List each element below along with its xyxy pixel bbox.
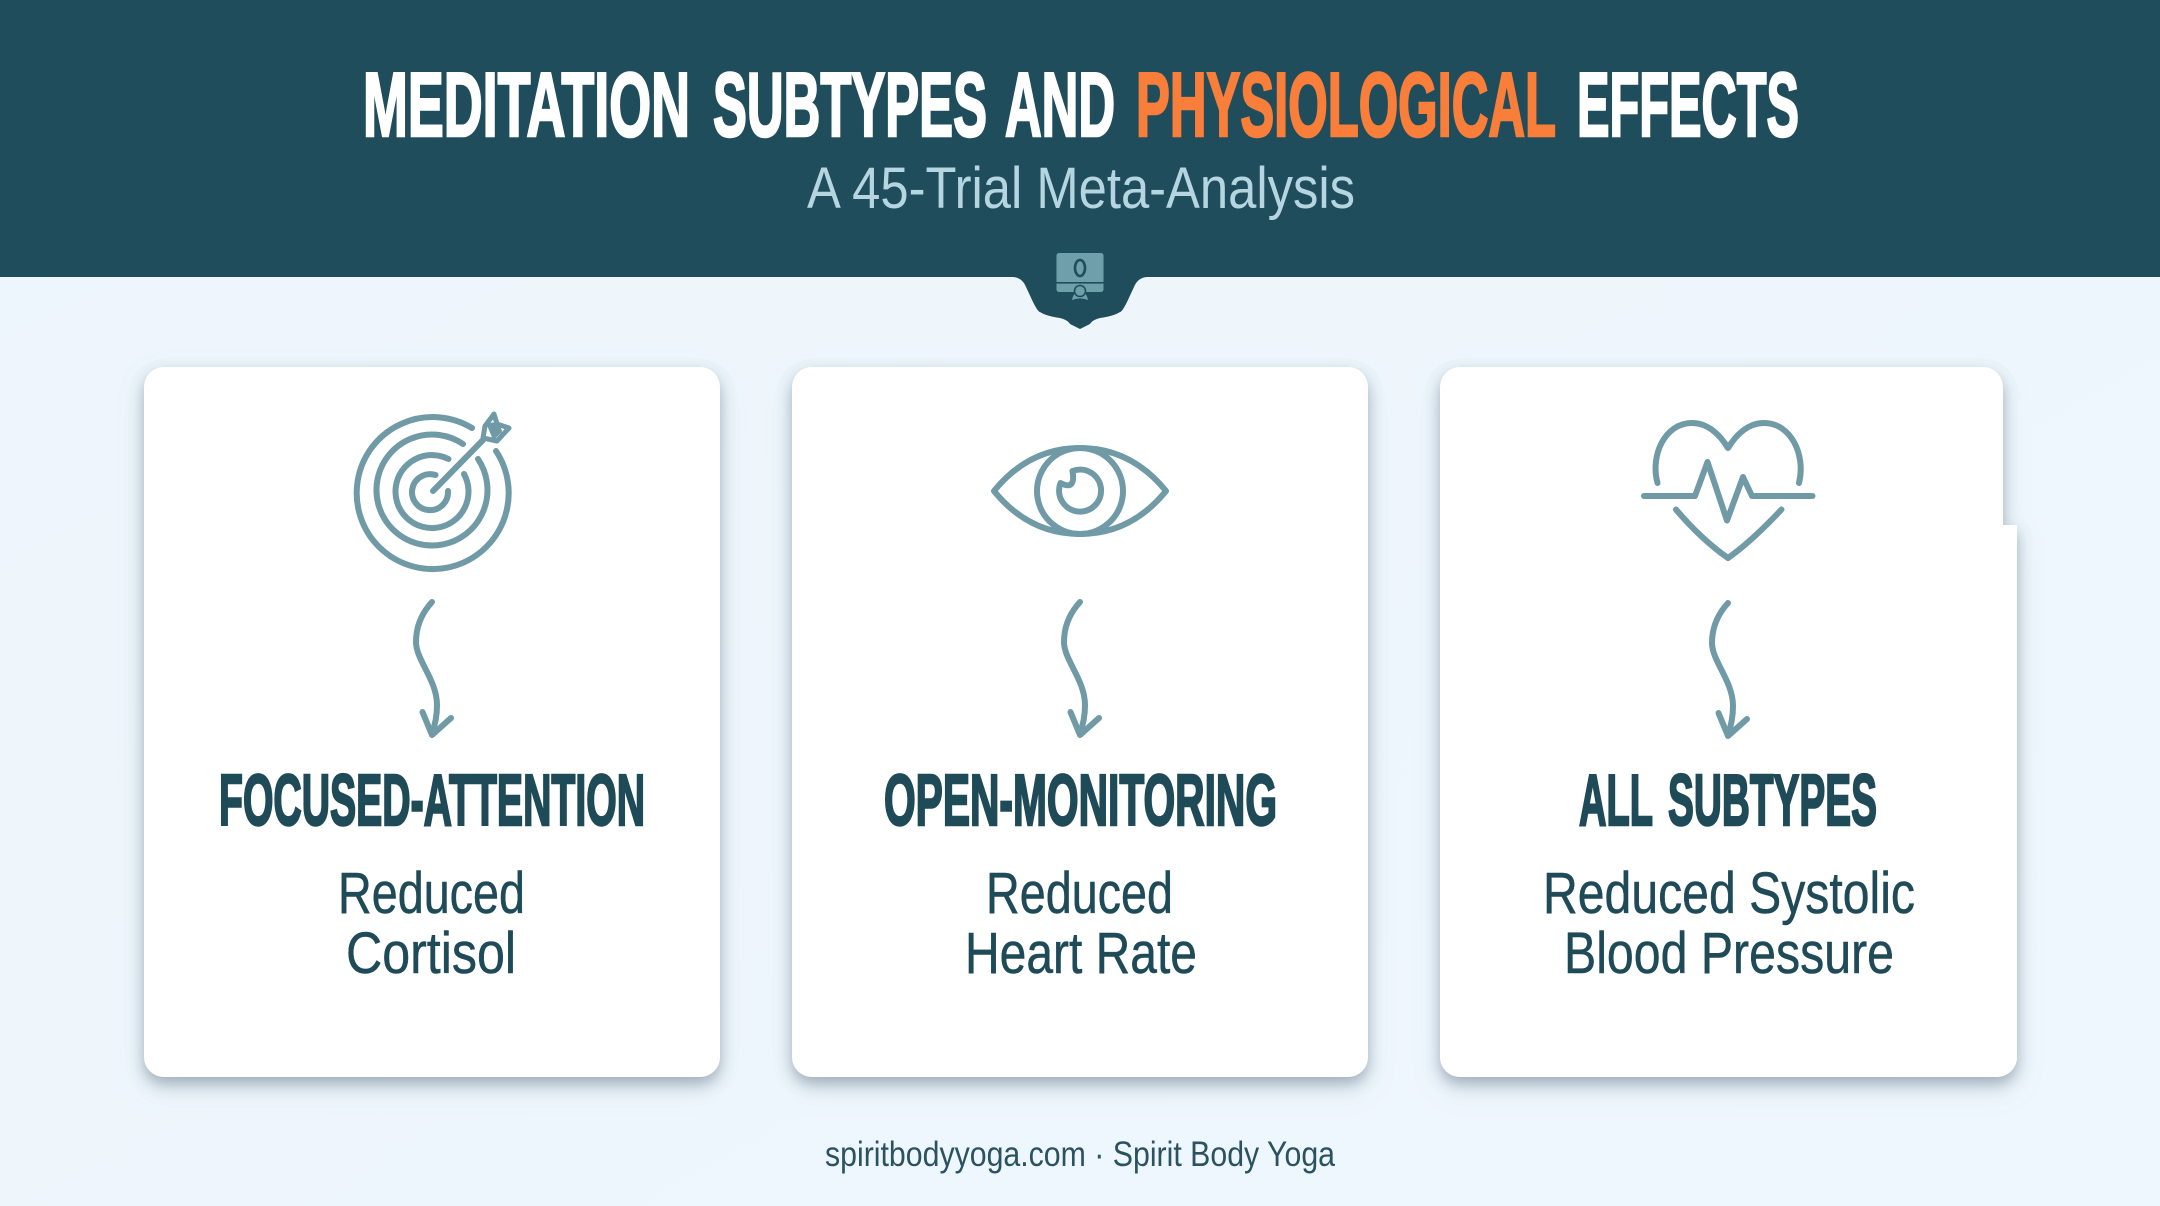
arrow [1064,602,1099,735]
effect text [1543,861,1915,986]
effect text: Heart Rate [965,921,1197,986]
icon: heart with pulse [1644,423,1812,558]
header band with notch [0,0,2160,329]
arrow [416,602,451,735]
header [0,0,2160,329]
heading: ALL [1579,761,1653,841]
title: MEDITATION [363,55,690,156]
icon: target with arrow [357,414,509,569]
subtitle: A 45-Trial Meta-Analysis [807,156,1355,221]
title: PHYSIOLOGICAL [1136,55,1556,156]
heading [1579,761,1877,841]
title: AND [1005,55,1115,156]
effect text: Cortisol [346,921,516,986]
title: EFFECTS [1577,55,1799,156]
heading: OPEN-MONITORING [884,761,1277,841]
panel: open-monitoring [792,367,1368,1077]
panel: focused-attention [144,367,720,1077]
card background [144,367,720,1077]
effect text: Reduced [986,861,1173,926]
effect text [965,861,1197,986]
title: SUBTYPES [713,55,987,156]
effect text: Blood Pressure [1564,921,1894,986]
panel: all subtypes [1440,367,2017,1077]
effect text [338,861,525,986]
effect text: Reduced [338,861,525,926]
icon: eye [994,448,1166,534]
heading: FOCUSED-ATTENTION [219,761,645,841]
heading: SUBTYPES [1668,761,1877,841]
arrow [1712,603,1747,736]
card background [1440,367,2017,1077]
title [363,55,1799,156]
icon: monitor [1056,253,1104,300]
card background [792,367,1368,1077]
effect text: Reduced Systolic [1543,861,1915,926]
footer: spiritbodyyoga.com · Spirit Body Yoga [825,1135,1335,1174]
